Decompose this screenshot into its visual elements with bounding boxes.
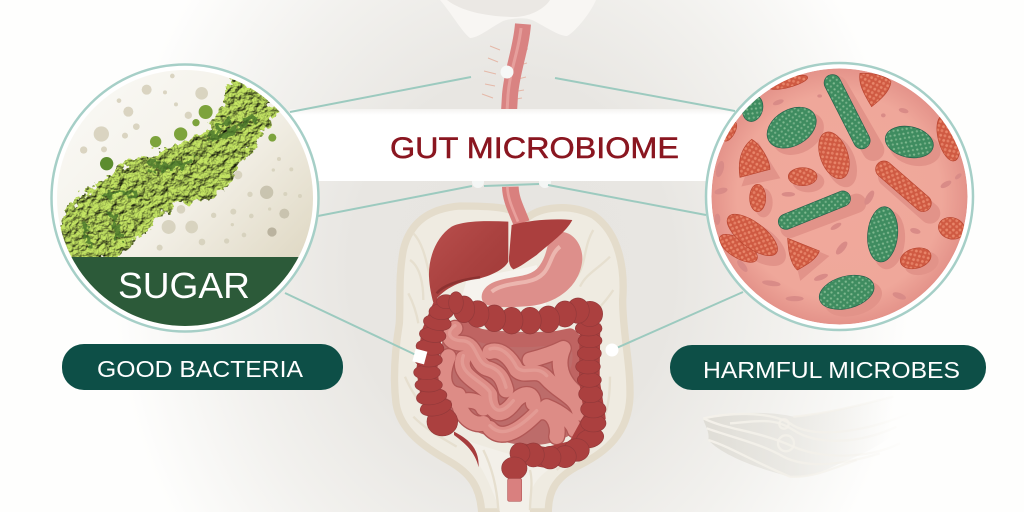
panel: harmful microbes circle [706, 63, 973, 330]
title band [290, 109, 740, 181]
gap behind stomach [460, 265, 547, 307]
pill: good bacteria: GOOD BACTERIA [97, 356, 304, 382]
small intestine loops [444, 326, 580, 437]
sugar label band [72, 257, 298, 326]
lower connector nodes [472, 176, 551, 188]
collar at top of figure [440, 0, 596, 38]
pill: harmful microbes: HARMFUL MICROBES [703, 357, 960, 383]
esophagus lower [510, 187, 522, 223]
small clumps [100, 105, 276, 170]
floating sugar particles [80, 74, 302, 251]
faint nerve illustration bottom right [703, 397, 920, 477]
rectum [508, 479, 522, 501]
torso outline [394, 206, 630, 512]
title: GUT MICROBIOME [390, 132, 679, 165]
red microbes [715, 72, 967, 272]
small intestine backdrop [438, 323, 584, 445]
green microbes [740, 72, 936, 315]
connector lines [285, 77, 743, 355]
pill: harmful microbes [670, 345, 986, 390]
stomach [482, 232, 582, 307]
esophagus upper [482, 24, 528, 112]
pelvic light area [457, 437, 553, 512]
ribs [405, 230, 613, 510]
small pink cells [714, 94, 963, 301]
liver [429, 219, 572, 303]
green bacteria colony [58, 77, 277, 260]
large intestine [414, 292, 606, 501]
torso with organs [394, 187, 630, 512]
connector nodes [412, 66, 618, 364]
sugar label: SUGAR [118, 265, 250, 306]
pill: good bacteria [62, 344, 343, 390]
appendix [454, 432, 479, 467]
panel: good bacteria circle [50, 60, 320, 340]
microbe shadows [723, 87, 944, 323]
